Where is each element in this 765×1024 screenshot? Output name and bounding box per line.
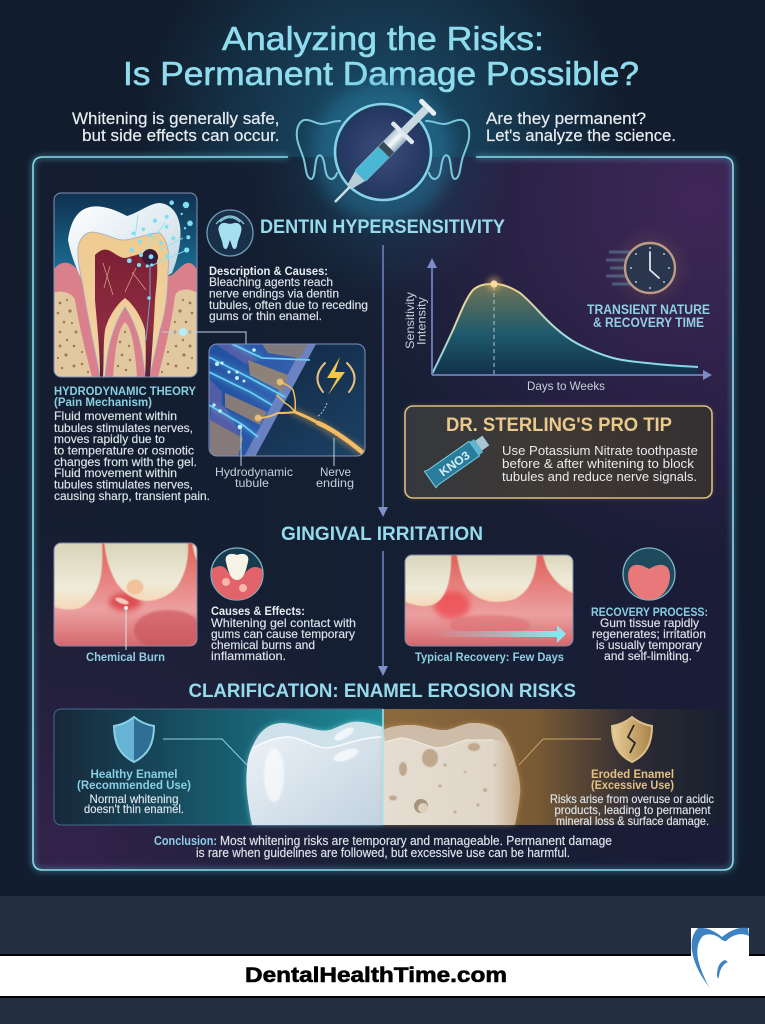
text: pro tip body: tubules and reduce nerve signals. xyxy=(502,469,697,484)
text: hydrodynamic theory xyxy=(54,384,210,503)
arrow: gingival section downward xyxy=(378,551,388,676)
illustration: eroded enamel half tooth xyxy=(383,723,520,825)
main panel xyxy=(33,157,733,870)
text: hydrodynamic theory: causing sharp, transient pain. xyxy=(54,489,210,503)
title: Analyzing the Risks: xyxy=(222,20,544,57)
zoomed tubule and nerve illustration xyxy=(209,344,365,466)
text: description and causes: gums or thin enamel. xyxy=(209,309,322,323)
heading: gingival irritation: GINGIVAL IRRITATION xyxy=(281,524,483,545)
intro text: right: Let's analyze the science. xyxy=(486,127,676,145)
text: causes and effects: chemical burns and xyxy=(211,638,315,652)
text: description and causes: tubules, often due to receding xyxy=(209,298,368,312)
text: causes and effects: Causes & Effects: xyxy=(211,604,305,618)
text: recovery process: and self-limiting. xyxy=(604,649,692,663)
text: description and causes xyxy=(209,264,368,323)
chart: sensitivity over time: Intensity xyxy=(414,297,428,345)
callout: pro tip: DR. STERLING'S PRO TIP xyxy=(446,414,672,436)
title: Is Permanent Damage Possible? xyxy=(123,55,639,92)
text: recovery process xyxy=(591,605,708,663)
title xyxy=(123,20,639,92)
text: eroded enamel: products, leading to permanent xyxy=(554,803,711,817)
text: healthy enamel xyxy=(77,767,191,816)
text: causes and effects: inflammation. xyxy=(211,649,286,663)
chart: sensitivity over time: Sensitivity xyxy=(403,292,417,349)
text: causes and effects xyxy=(211,604,356,663)
heading: dentin hypersensitivity: DENTIN HYPERSENSITIVITY xyxy=(260,217,505,238)
text: description and causes: Description & Causes: xyxy=(209,264,328,278)
label: hydrodynamic tubule: tubule xyxy=(235,476,269,490)
text: causes and effects: Whitening gel contact with xyxy=(211,616,356,630)
text: hydrodynamic theory: Fluid movement within xyxy=(54,409,177,423)
logo: blue tooth xyxy=(691,928,749,988)
intro text: right: Are they permanent? xyxy=(486,110,646,128)
icon: healthy gum xyxy=(623,548,675,600)
illustration: chemical burn xyxy=(50,540,202,664)
connector to zoomed nerve view xyxy=(162,328,246,344)
text: healthy enamel: (Recommended Use) xyxy=(77,778,191,792)
text: hydrodynamic theory: changes from with the gel. xyxy=(54,455,197,469)
text: recovery process: Gum tissue rapidly xyxy=(600,616,699,630)
label: hydrodynamic tubule: Hydrodynamic xyxy=(215,465,293,479)
text: eroded enamel: Risks arise from overuse or acidic xyxy=(550,792,714,806)
label: nerve ending: ending xyxy=(316,476,354,490)
illustration: healthy enamel half tooth xyxy=(246,722,383,825)
icon: irritated gum xyxy=(208,548,266,602)
text: pro tip body: Use Potassium Nitrate toothpaste xyxy=(502,443,698,458)
chart: sensitivity over time: Days to Weeks xyxy=(527,379,605,393)
text: healthy enamel: Normal whitening xyxy=(90,792,178,806)
illustration: gum recovery xyxy=(404,554,574,664)
text: hydrodynamic theory: HYDRODYNAMIC THEORY xyxy=(54,384,196,398)
shield: eroded enamel xyxy=(519,717,652,765)
label: nerve ending xyxy=(316,465,354,490)
text: hydrodynamic theory: to temperature or osmotic xyxy=(54,444,194,458)
text: pro tip body xyxy=(502,443,698,484)
text: description and causes: nerve endings via dentin xyxy=(209,286,339,300)
text: recovery process: is usually temporary xyxy=(596,638,702,652)
text: hydrodynamic theory: tubules stimulates nerves, xyxy=(54,478,193,492)
website name: DentalHealthTime.com xyxy=(245,964,507,987)
label: hydrodynamic tubule xyxy=(215,465,293,490)
icon: KNO3 toothpaste tube xyxy=(424,432,492,488)
text: eroded enamel: (Excessive Use) xyxy=(591,778,674,792)
panel: dentin hypersensitivity left illustration xyxy=(53,193,365,503)
text: healthy enamel: doesn't thin enamel. xyxy=(84,802,184,816)
icon: clock with motion trails xyxy=(606,238,680,298)
central icon: syringe with teeth xyxy=(297,82,469,222)
text: conclusion xyxy=(154,834,612,860)
footer band xyxy=(0,896,765,1024)
chart: sensitivity over time xyxy=(403,258,712,393)
heading: clarification: CLARIFICATION: ENAMEL EROSION RISKS xyxy=(188,681,576,702)
text: conclusion: Conclusion: xyxy=(154,834,217,848)
intro text: left: Whitening is generally safe, xyxy=(72,110,280,128)
text: description and causes: Bleaching agents reach xyxy=(209,275,333,289)
text: conclusion: is rare when guidelines are followed, but excessive use can be harmful. xyxy=(196,846,570,860)
label: typical recovery: Typical Recovery: Few Days xyxy=(415,650,564,664)
intro text: right xyxy=(486,110,676,145)
text: hydrodynamic theory: (Pain Mechanism) xyxy=(54,395,152,409)
shield: healthy enamel xyxy=(114,717,247,765)
text: hydrodynamic theory: moves rapidly due to xyxy=(54,432,165,446)
text: pro tip body: before & after whitening to block xyxy=(502,456,695,471)
intro text: left: but side effects can occur. xyxy=(82,127,280,145)
panel: enamel comparison xyxy=(54,709,725,828)
icon: sensitive tooth xyxy=(207,210,253,256)
label: chemical burn: Chemical Burn xyxy=(86,650,165,664)
text: eroded enamel: mineral loss & surface damage. xyxy=(556,814,709,828)
text: eroded enamel xyxy=(550,767,714,828)
text: recovery process: regenerates; irritation xyxy=(592,627,706,641)
label: nerve ending: Nerve xyxy=(320,465,351,479)
text: conclusion: Most whitening risks are temporary and manageable. Permanent damage xyxy=(220,834,612,848)
arrow: dentin section downward xyxy=(378,245,388,517)
text: causes and effects: gums can cause temporary xyxy=(211,627,355,641)
intro text: left xyxy=(72,110,280,145)
text: recovery process: RECOVERY PROCESS: xyxy=(591,605,708,619)
tooth cross-section illustration xyxy=(53,193,197,377)
callout: pro tip xyxy=(405,406,712,498)
label: transient nature: & RECOVERY TIME xyxy=(593,315,704,330)
text: eroded enamel: Eroded Enamel xyxy=(591,767,674,781)
label: transient nature: TRANSIENT NATURE xyxy=(587,302,710,317)
label: transient nature xyxy=(587,302,710,330)
icon: KNO3 toothpaste tube: KNO3 xyxy=(437,448,473,479)
text: hydrodynamic theory: Fluid movement within xyxy=(54,466,177,480)
text: hydrodynamic theory: tubules stimulates nerves, xyxy=(54,421,193,435)
text: healthy enamel: Healthy Enamel xyxy=(90,767,178,781)
